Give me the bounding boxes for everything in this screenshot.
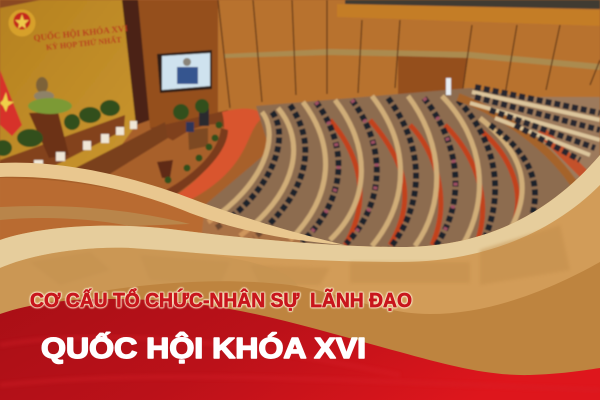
balcony rail — [337, 4, 600, 26]
wall title: KỲ HỌP THỨ NHẤT — [45, 34, 123, 52]
banner: upper translucent ribbon — [0, 163, 345, 252]
plants — [0, 98, 222, 184]
wall title — [33, 23, 129, 52]
screen — [157, 50, 212, 93]
seating area — [200, 78, 600, 250]
stage floor — [115, 124, 225, 205]
chairs — [34, 121, 137, 166]
emblem — [8, 10, 36, 36]
wood panel — [138, 0, 228, 128]
banner: cream edge — [0, 155, 600, 268]
bust — [34, 77, 54, 101]
right section floor — [458, 97, 600, 200]
banner: tan body — [0, 155, 600, 400]
right rows — [470, 92, 600, 155]
aisles — [330, 120, 518, 245]
banner: red base — [0, 299, 600, 400]
flag — [0, 70, 22, 136]
small lectern — [157, 160, 173, 178]
coloured delegates — [302, 98, 456, 248]
ribbon lower strip — [0, 206, 190, 226]
dark column — [122, 0, 150, 125]
dais wall — [60, 122, 168, 178]
podium wood backdrop lower — [150, 110, 232, 150]
subtitle: CƠ CẤU TỔ CHỨC-NHÂN SỰ LÃNH ĐẠO — [30, 288, 412, 312]
wall title: QUỐC HỘI KHÓA XVI — [33, 23, 129, 43]
red carpet — [172, 109, 262, 200]
right wall — [218, 0, 600, 112]
seating base — [200, 88, 600, 250]
wall stripe — [224, 49, 600, 70]
speaker's rostrum figure — [186, 122, 194, 132]
banner: darker left tan — [0, 248, 300, 315]
balcony audience — [345, 0, 600, 9]
photo: National Assembly chamber — [0, 0, 600, 260]
bust pedestal — [29, 112, 69, 158]
red streaks — [0, 337, 600, 390]
left golden wall — [0, 0, 136, 175]
main title: QUỐC HỘI KHÓA XVI — [41, 331, 366, 365]
lectern — [188, 128, 208, 150]
banner: photo texture — [30, 225, 570, 285]
door — [398, 56, 468, 98]
right section rail — [458, 97, 578, 190]
people rows — [216, 98, 535, 248]
banner: lower brown — [0, 262, 600, 400]
ribbon shade — [0, 178, 300, 252]
photo base wood — [0, 0, 600, 260]
wall grooves — [218, 0, 600, 108]
ribbon cream stripe — [0, 163, 345, 245]
speaker in aisle — [446, 78, 451, 95]
desk rows — [208, 96, 522, 246]
